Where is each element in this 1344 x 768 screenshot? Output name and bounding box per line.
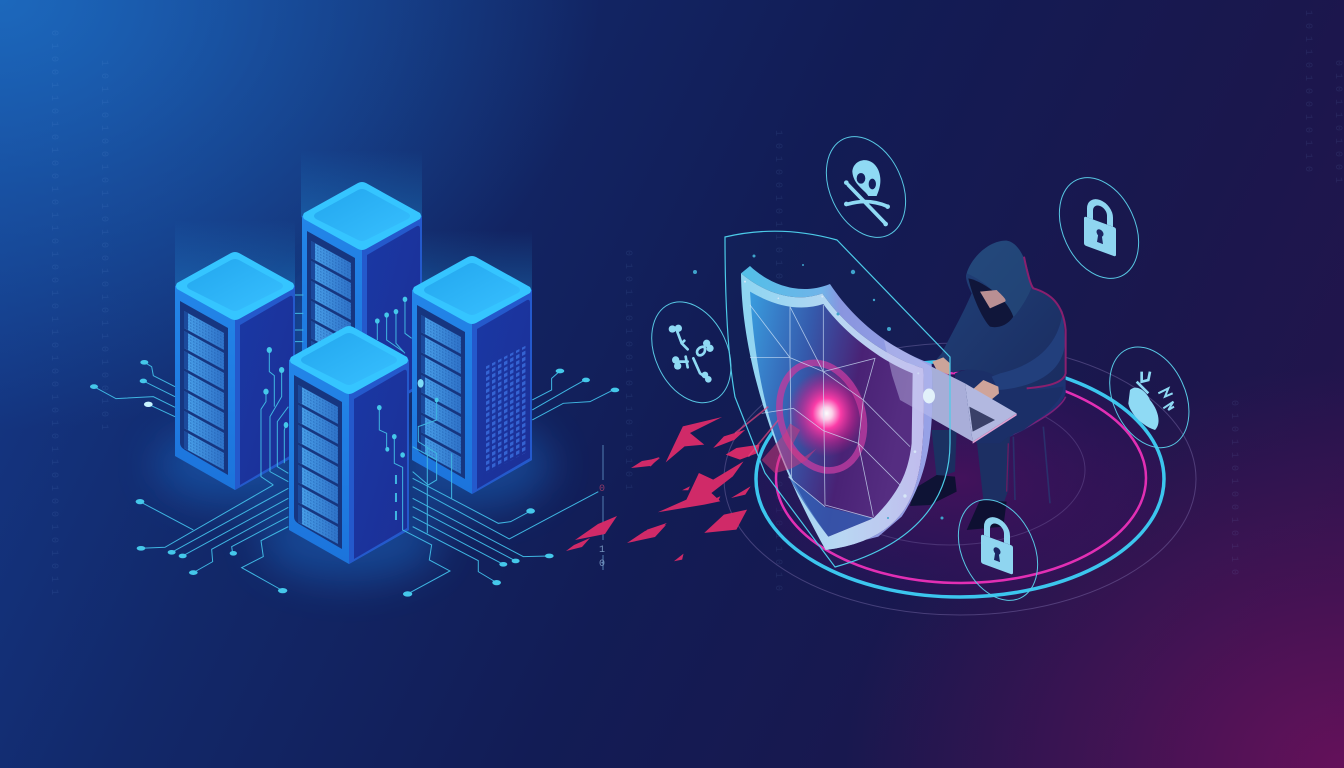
light beams above servers: [175, 150, 532, 323]
binary code columns: 01011010010110: [1228, 400, 1239, 582]
circuit traces left: [90, 347, 288, 593]
binary code columns: 01001101010010110100101101001010110100101011: [48, 30, 59, 602]
binary code columns: 10110100101101001010110100101: [98, 60, 109, 437]
glass shield outline: [725, 231, 950, 567]
server: right: [412, 256, 532, 494]
data stream marker: 0: [599, 559, 605, 570]
translucent laptop lid over shield: [884, 340, 935, 418]
server: back: [302, 182, 422, 420]
floor glow under servers: [155, 270, 552, 582]
dot grid on right server: [485, 345, 527, 474]
icon: broken bones: [636, 289, 746, 416]
circuit traces between back servers: [294, 295, 412, 353]
chair: [1007, 373, 1066, 503]
icon: padlock top right: [1044, 165, 1154, 291]
circuit traces right: [377, 369, 619, 597]
particles: [693, 254, 944, 520]
red attack shards: [566, 417, 760, 561]
laptop: [932, 367, 1017, 444]
hacker figure: [910, 241, 1066, 530]
binary code columns: 0101101001011010101: [622, 250, 633, 497]
data stream marker: 1: [599, 545, 605, 556]
server: left: [175, 252, 295, 490]
binary code columns: 101001011010010110100101101001011010: [772, 130, 783, 598]
shield: [735, 266, 932, 550]
icon: broken lock: [1094, 334, 1204, 461]
icon: skull and crossbones: [811, 124, 921, 250]
server: front: [289, 326, 409, 564]
binary code columns: 1011010010110: [1302, 10, 1313, 179]
binary code columns: 0101101001: [1332, 60, 1343, 190]
data stream marker: [599, 445, 605, 570]
icon: padlock bottom: [943, 487, 1053, 613]
floor rings: [724, 343, 1196, 615]
binary code columns: [48, 10, 1343, 602]
data stream marker: 0: [599, 484, 605, 495]
